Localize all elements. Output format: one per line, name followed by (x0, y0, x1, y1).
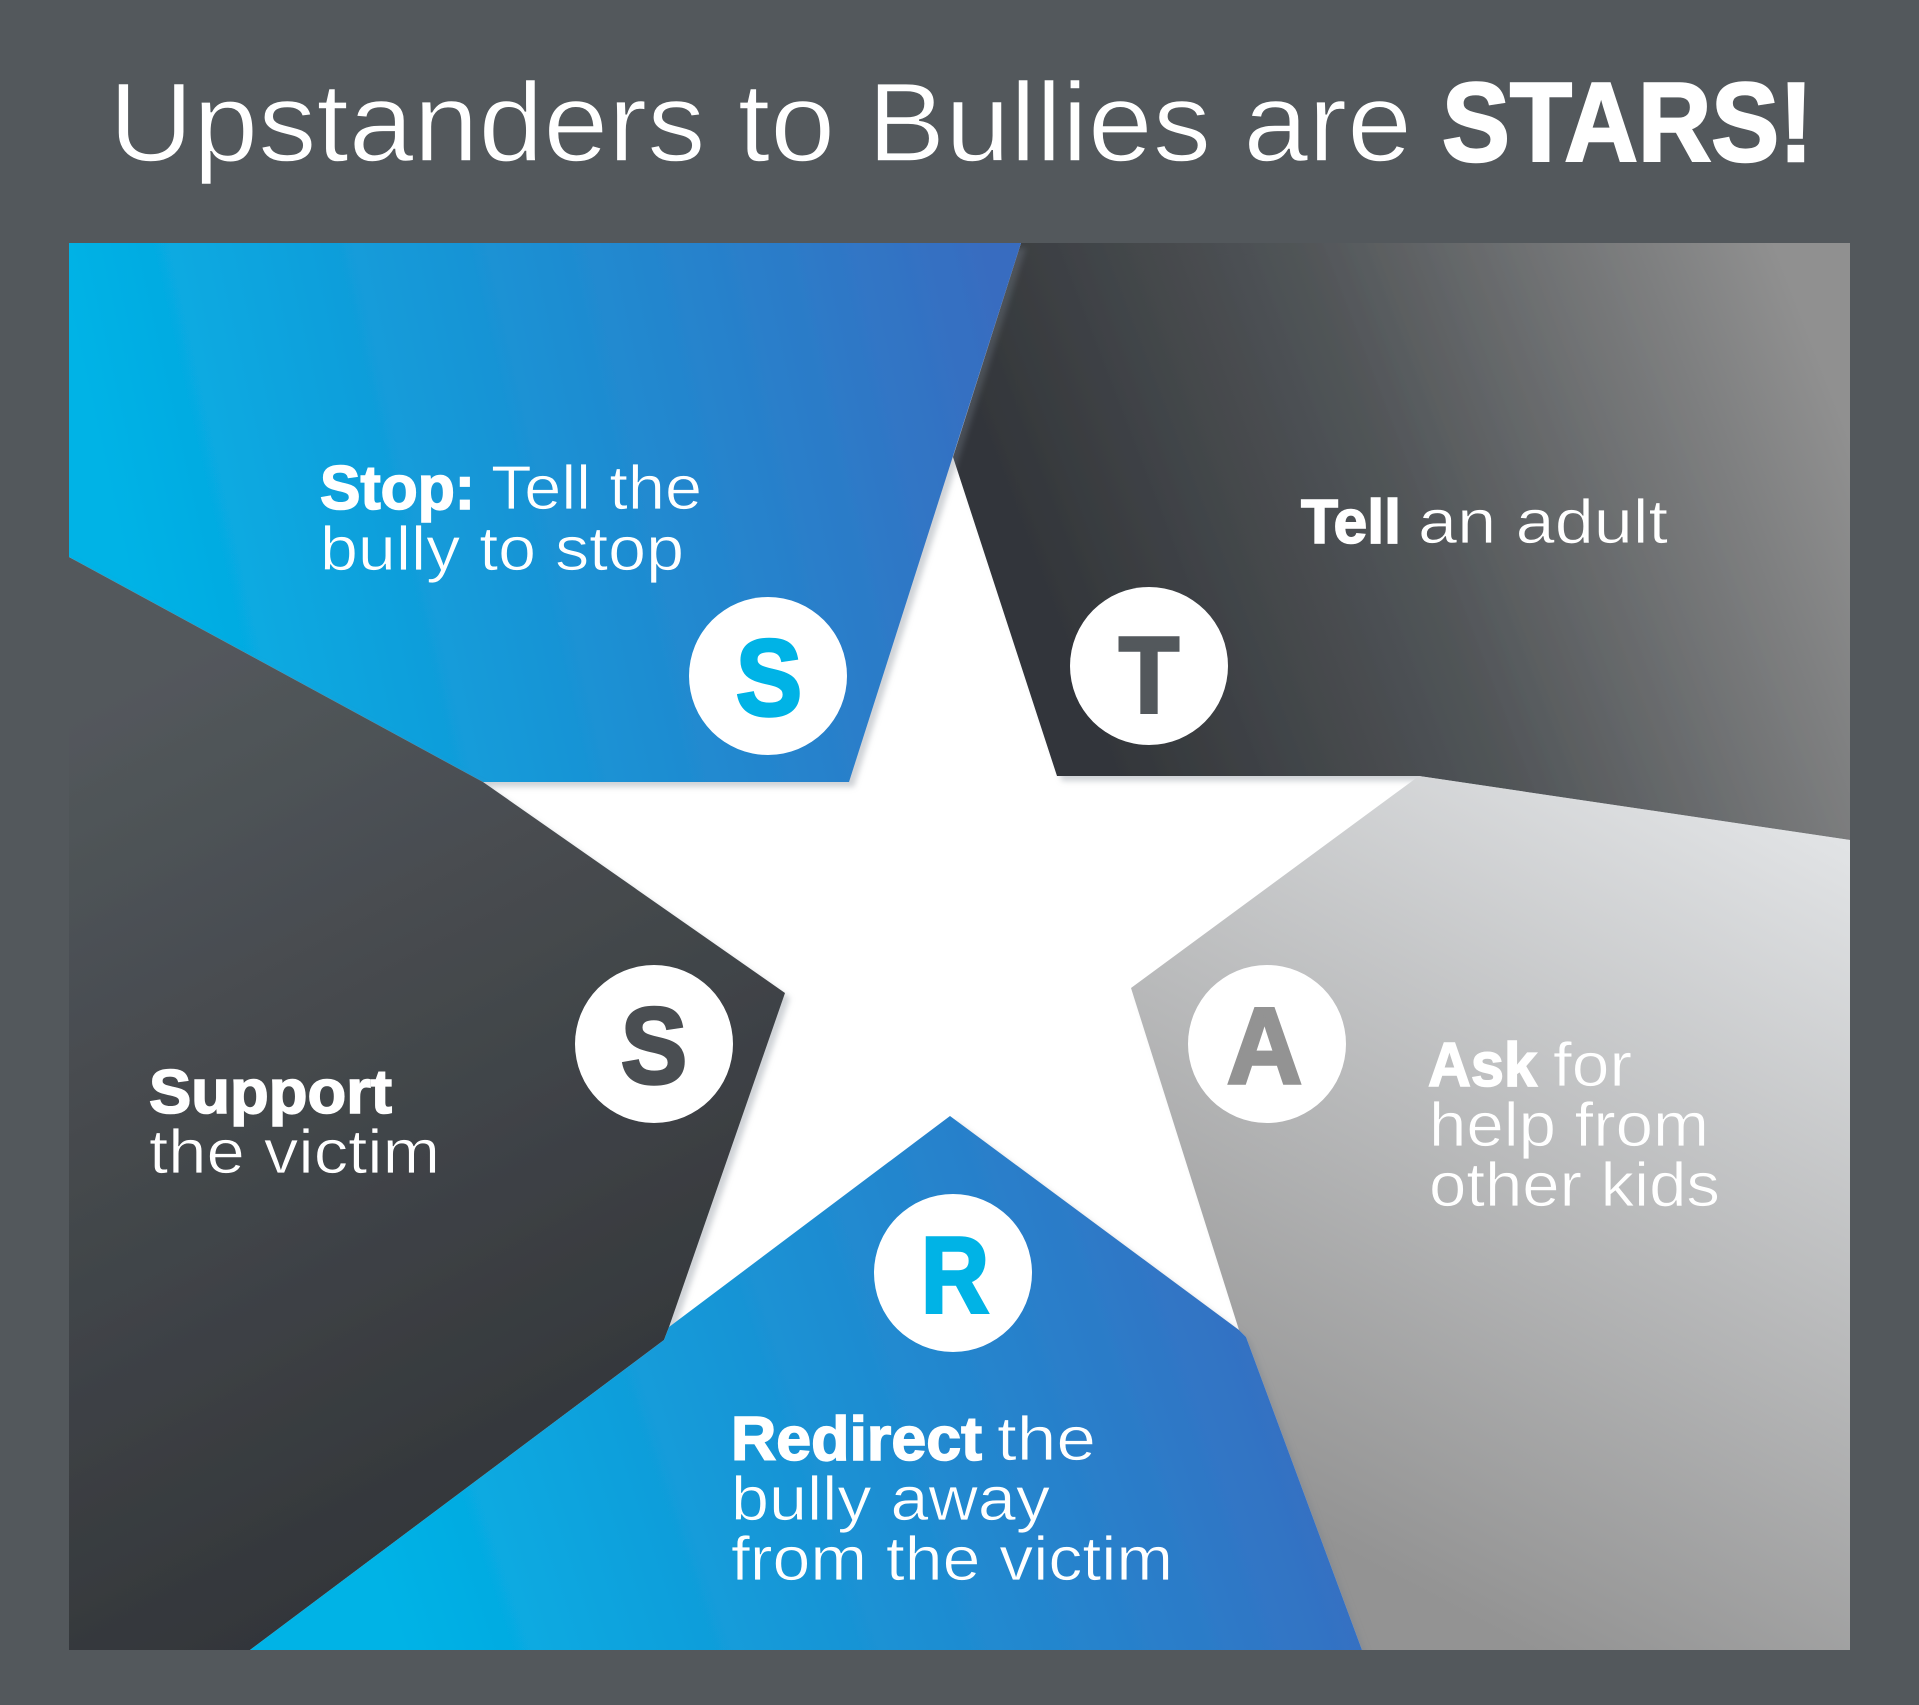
text: Ask for help from other kids: help from (1429, 1091, 1709, 1160)
text: Ask for help from other kids: other kids (1429, 1151, 1720, 1220)
text: Support the victim (150, 1068, 436, 1174)
icon: A circle (1188, 965, 1346, 1123)
text: Redirect the bully away from the victim: Redirect (731, 1405, 982, 1474)
white star panel (69, 243, 1850, 1650)
text: Stop tell the bully to stop: bully to stop (320, 515, 684, 584)
panel: Stop (69, 243, 1021, 782)
text: Tell an adult: Tell (1301, 488, 1401, 557)
text: Ask for help from other kids: for (1553, 1031, 1632, 1100)
icon: T circle: T (1119, 614, 1179, 735)
icon: R circle: R (921, 1214, 989, 1335)
text: Ask for help from other kids (1428, 1040, 1717, 1206)
text: Support the victim: the victim (149, 1118, 440, 1187)
text: Stop tell the bully to stop (320, 454, 702, 584)
text: Tell an adult: an adult (1418, 488, 1668, 557)
icon: S circle dark (575, 965, 733, 1123)
icon: T circle (1070, 587, 1228, 745)
text: Tell an adult (1300, 497, 1668, 544)
icon: A circle: A (1227, 985, 1302, 1106)
title: Upstanders to Bullies are (109, 60, 1412, 185)
panel: Tell an adult (953, 243, 1850, 840)
icon: S circle dark: S (621, 985, 687, 1106)
icon: S circle blue: S (736, 617, 802, 738)
panel: Support (69, 557, 785, 1650)
text: Ask for help from other kids: Ask (1428, 1031, 1537, 1100)
text: Support the victim: Support (149, 1058, 392, 1127)
text: Redirect the bully away from the victim: from the victim (731, 1525, 1173, 1594)
text: Stop tell the bully to stop: Tell the (491, 454, 702, 523)
text: Stop tell the bully to stop: Stop: (320, 454, 475, 523)
icon: R circle (874, 1194, 1032, 1352)
text: Redirect the bully away from the victim (732, 1414, 1168, 1580)
panel: Redirect (250, 1116, 1362, 1650)
text: Redirect the bully away from the victim: the (997, 1405, 1096, 1474)
text: Redirect the bully away from the victim: bully away (731, 1465, 1050, 1534)
panel: Ask for help (1131, 776, 1850, 1650)
icon: S circle blue (689, 597, 847, 755)
title: STARS! (1442, 60, 1813, 185)
